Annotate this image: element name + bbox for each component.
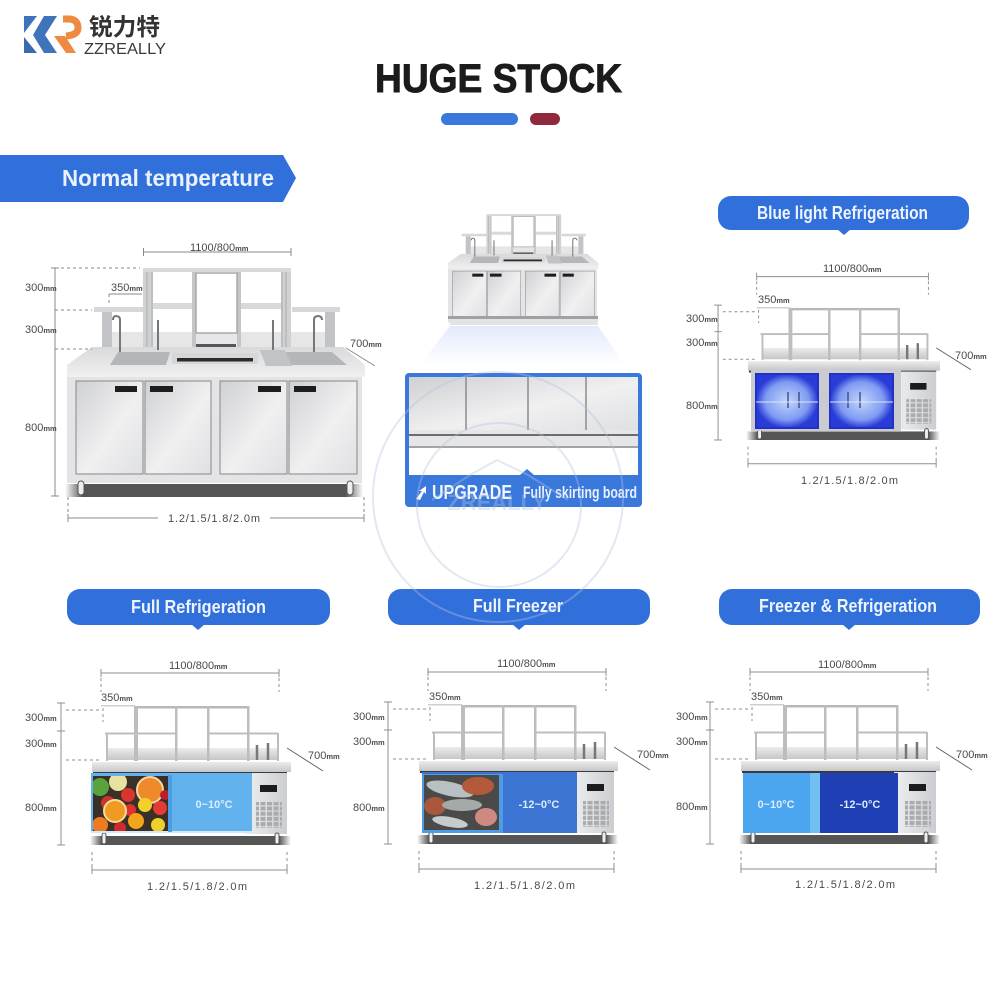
dimension labels: 800mm <box>353 802 385 814</box>
heading pill <box>718 196 969 235</box>
dimension labels: 1.2/1.5/1.8/2.0m <box>147 881 247 893</box>
dimension labels: 700mm <box>955 350 987 362</box>
dimension labels: 1.2/1.5/1.8/2.0m <box>801 475 898 487</box>
dimension lines <box>51 248 375 522</box>
unit illustration <box>706 668 972 873</box>
panel: upgrade skirting board <box>405 214 642 507</box>
logo chinese name: 锐力特 <box>89 14 160 40</box>
unit illustration <box>57 669 323 874</box>
temperature label: 0~10°C <box>195 799 233 811</box>
dimension labels: 1.2/1.5/1.8/2.0m <box>474 880 575 892</box>
panel: full refrigeration <box>25 589 340 893</box>
heading pill: Blue light Refrigeration <box>757 203 928 223</box>
dimension labels: 300mm <box>25 324 57 336</box>
banner: normal temperature: Normal temperature <box>62 165 274 191</box>
skirting label: Fully skirting board <box>523 483 637 502</box>
chilled temperature label: 0~10°C <box>757 799 795 811</box>
cabinet illustration <box>65 268 365 497</box>
heading pill: Full Freezer <box>473 596 563 616</box>
title accent bars <box>441 113 560 125</box>
dimension labels: 700mm <box>308 750 340 762</box>
dimension labels: 350mm <box>758 294 790 306</box>
dimension labels: 700mm <box>637 749 669 761</box>
heading pill <box>388 589 650 630</box>
dimension labels: 300mm <box>25 712 57 724</box>
unit illustration <box>714 273 971 468</box>
logo <box>24 14 166 58</box>
heading pill: Freezer & Refrigeration <box>759 596 937 616</box>
light beam <box>420 326 625 365</box>
banner: normal temperature <box>0 155 296 202</box>
dimension labels: 300mm <box>676 711 708 723</box>
dimension labels: 350mm <box>101 692 133 704</box>
fruit photo <box>93 776 168 831</box>
dimension labels: 350mm <box>111 282 143 294</box>
dimension labels: 300mm <box>676 736 708 748</box>
dimension labels: 1100/800mm <box>190 242 249 254</box>
heading pill <box>67 589 330 630</box>
dimension labels: 1.2/1.5/1.8/2.0m <box>168 513 260 525</box>
dimension labels <box>676 659 988 891</box>
dimension labels: 350mm <box>429 691 461 703</box>
dimension labels: 800mm <box>25 802 57 814</box>
dimension labels <box>686 263 987 487</box>
dimension labels: 700mm <box>350 338 382 350</box>
unit illustration <box>384 668 650 873</box>
watermark <box>373 372 623 622</box>
dimension labels: 700mm <box>956 749 988 761</box>
dimension labels <box>25 242 382 525</box>
dimension labels: 1100/800mm <box>497 658 556 670</box>
panel: freezer and refrigeration <box>676 589 988 891</box>
dimension labels: 300mm <box>25 738 57 750</box>
dimension labels: 800mm <box>676 801 708 813</box>
heading pill: Full Refrigeration <box>131 597 266 617</box>
dimension labels: 1100/800mm <box>169 660 228 672</box>
dimension labels: 800mm <box>686 400 718 412</box>
temperature label: -12~0°C <box>519 799 559 811</box>
small cabinet illustration <box>448 214 599 325</box>
dimension labels <box>353 658 669 892</box>
title: HUGE STOCK <box>375 57 622 101</box>
dimension labels: 300mm <box>353 711 385 723</box>
dimension labels: 350mm <box>751 691 783 703</box>
dimension labels: 300mm <box>353 736 385 748</box>
upgrade label: UPGRADE <box>432 482 512 504</box>
fish photo <box>424 775 499 830</box>
heading pill <box>719 589 980 630</box>
dimension labels: 300mm <box>686 337 718 349</box>
watermark: ZREALLY <box>447 490 547 515</box>
dimension labels: 1100/800mm <box>818 659 877 671</box>
dimension labels <box>25 660 340 893</box>
dimension labels: 300mm <box>25 282 57 294</box>
icon: KR logo mark <box>24 16 78 53</box>
frozen temperature label: -12~0°C <box>840 799 880 811</box>
dimension labels: 800mm <box>25 422 57 434</box>
icon: upgrade arrow <box>416 486 426 500</box>
dimension labels: 1100/800mm <box>823 263 882 275</box>
panel: blue light refrigeration <box>686 196 987 487</box>
upgrade detail box <box>405 373 642 507</box>
dimension labels: 300mm <box>686 313 718 325</box>
panel: normal temperature unit <box>25 242 382 525</box>
logo english name: ZZREALLY <box>84 41 166 58</box>
panel: full freezer <box>353 589 669 892</box>
dimension labels: 1.2/1.5/1.8/2.0m <box>795 879 895 891</box>
